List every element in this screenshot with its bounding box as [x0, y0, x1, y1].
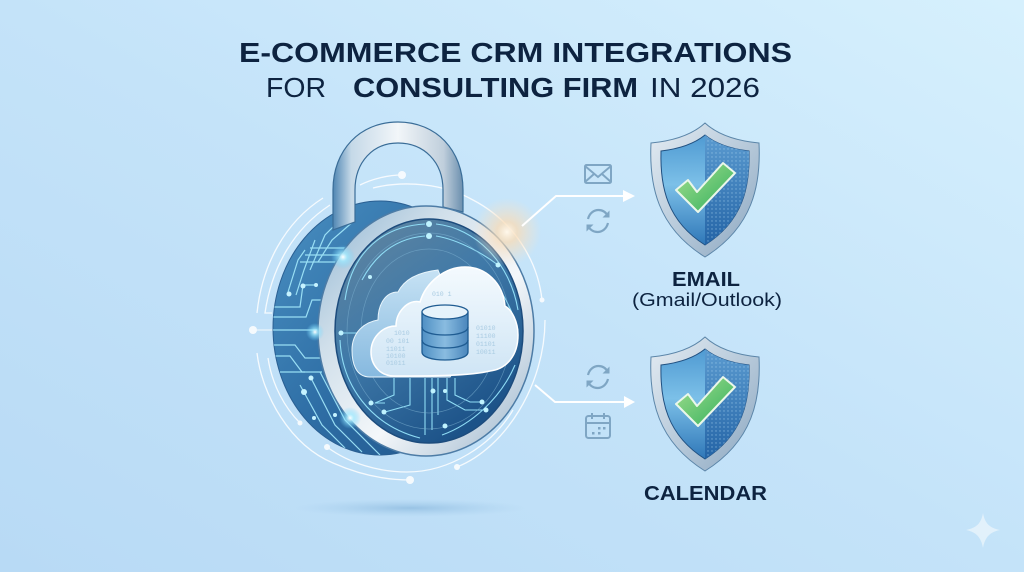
lock face — [335, 219, 523, 443]
orbit rings — [249, 171, 545, 484]
arrow: to calendar — [535, 385, 635, 408]
padlock — [273, 122, 534, 456]
binary digits: 01010 — [476, 325, 496, 332]
binary digits: 11011 — [386, 346, 406, 353]
cloud — [352, 267, 518, 377]
light flare — [473, 198, 541, 266]
title: FOR — [266, 72, 326, 103]
binary digits: 01101 — [476, 341, 496, 348]
title — [239, 37, 792, 103]
database icon — [422, 305, 468, 360]
title: E-COMMERCE CRM INTEGRATIONS — [239, 37, 792, 68]
icon: sparkle — [966, 513, 1000, 548]
title: IN 2026 — [650, 72, 760, 103]
shackle — [333, 122, 463, 230]
binary digits: 01011 — [386, 360, 406, 367]
label: email: (Gmail/Outlook) — [632, 289, 782, 310]
title: CONSULTING FIRM — [353, 72, 638, 103]
binary digits: 10100 — [386, 353, 406, 360]
binary digits: 10011 — [476, 349, 496, 356]
binary digits: 00 101 — [386, 338, 410, 345]
shield: email — [651, 123, 759, 257]
icon: sync email — [586, 210, 610, 232]
label: calendar: CALENDAR — [644, 483, 768, 505]
binary digits: 1010 — [394, 330, 410, 337]
binary digits: 11100 — [476, 333, 496, 340]
icon: envelope — [585, 165, 611, 183]
label: email — [632, 269, 782, 310]
front ring — [318, 206, 534, 456]
binary digits — [386, 291, 496, 367]
binary digits: 010 1 — [432, 291, 452, 298]
label: email: EMAIL — [672, 269, 740, 291]
lock body side — [272, 200, 412, 456]
icon: sync calendar — [586, 366, 610, 388]
icon: calendar — [586, 413, 610, 438]
arrow: to email — [522, 190, 635, 226]
shield: calendar — [651, 337, 759, 471]
ground shadow — [295, 499, 525, 517]
glow highlights — [331, 245, 355, 269]
